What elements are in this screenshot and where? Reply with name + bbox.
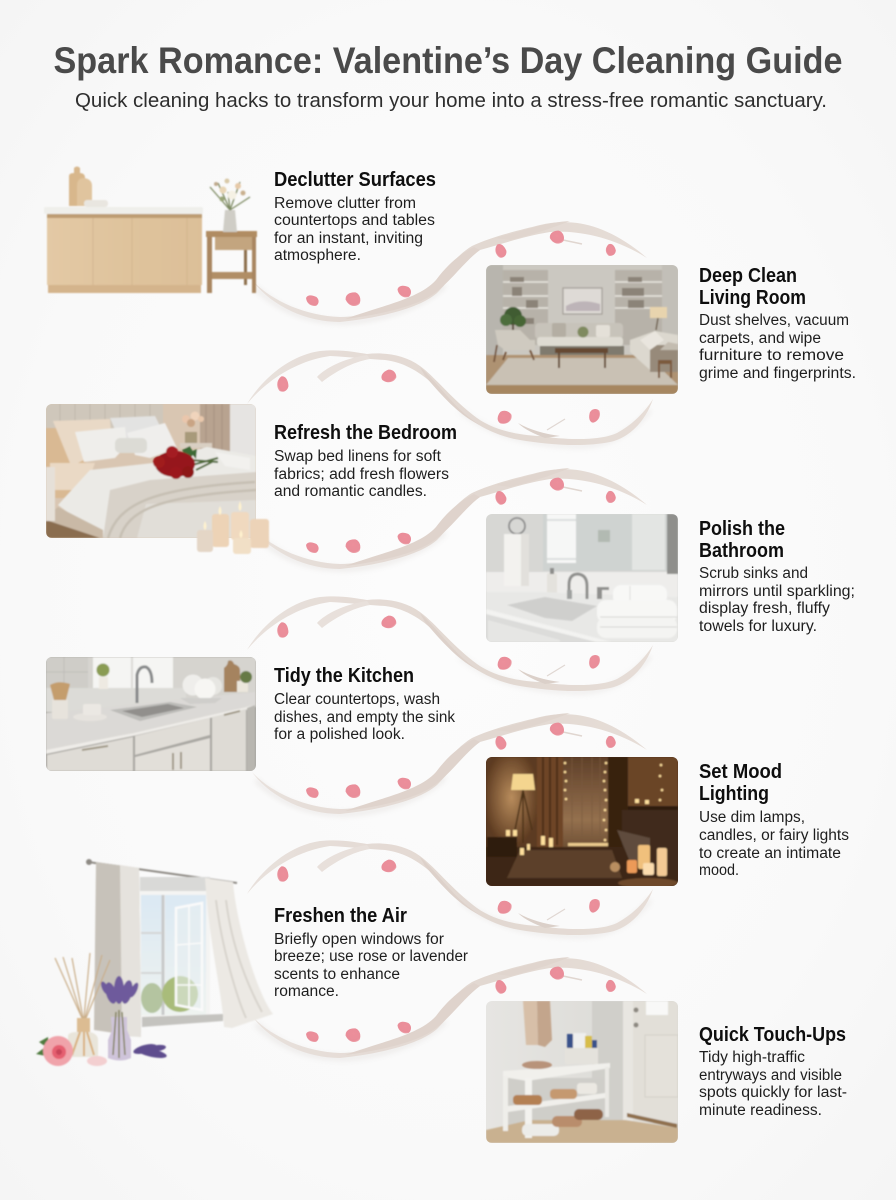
- step: Declutter Surfaces: atmosphere.: [274, 247, 361, 264]
- ribbon connector: Bathroom to Kitchen: [247, 596, 653, 692]
- photo: bedroom: [46, 404, 269, 554]
- step: Set Mood Lighting: to create an intimate: [699, 845, 841, 862]
- step: Tidy the Kitchen: for a polished look.: [274, 726, 405, 743]
- step: Deep Clean Living Room: Dust shelves, vacuum: [699, 312, 849, 329]
- ribbon connector: Declutter to Living Room: [252, 221, 647, 322]
- step: Freshen the Air: [274, 904, 468, 1000]
- step: Tidy the Kitchen: dishes, and empty the sink: [274, 709, 455, 726]
- photo: mood lighting: [486, 757, 678, 888]
- step: Freshen the Air: scents to enhance: [274, 966, 400, 983]
- step: Deep Clean Living Room: Deep Clean: [699, 264, 797, 287]
- step: Freshen the Air: Briefly open windows for: [274, 931, 444, 948]
- step: Tidy the Kitchen: Clear countertops, wash: [274, 691, 440, 708]
- illustration: kitchen counter and side table: [44, 166, 257, 293]
- step: Deep Clean Living Room: carpets, and wipe: [699, 330, 821, 347]
- step: Deep Clean Living Room: [699, 264, 856, 382]
- step: Declutter Surfaces: Remove clutter from: [274, 195, 416, 212]
- step: Declutter Surfaces: for an instant, inviting: [274, 230, 423, 247]
- step: Quick Touch-Ups: entryways and visible: [699, 1067, 842, 1084]
- step: Polish the Bathroom: Bathroom: [699, 539, 784, 562]
- step: Quick Touch-Ups: Quick Touch-Ups: [699, 1023, 846, 1046]
- step: Quick Touch-Ups: Tidy high-traffic: [699, 1049, 805, 1066]
- step: Refresh the Bedroom: fabrics; add fresh flowers: [274, 466, 449, 483]
- step: Deep Clean Living Room: Living Room: [699, 286, 806, 309]
- photo: kitchen: [46, 657, 256, 771]
- step: Set Mood Lighting: Set Mood: [699, 760, 782, 783]
- photo: entryway: [486, 1001, 678, 1143]
- step: Quick Touch-Ups: [699, 1023, 847, 1119]
- icon: candles: [197, 501, 269, 554]
- step: Set Mood Lighting: Lighting: [699, 782, 769, 805]
- step: Freshen the Air: romance.: [274, 983, 339, 1000]
- title: Spark Romance: Valentine’s Day Cleaning Guide: [54, 40, 842, 81]
- ribbon connector: Living Room to Bedroom: [247, 350, 653, 446]
- step: Refresh the Bedroom: and romantic candles.: [274, 483, 427, 500]
- step: Declutter Surfaces: Declutter Surfaces: [274, 168, 436, 191]
- step: Quick Touch-Ups: minute readiness.: [699, 1102, 822, 1119]
- step: Set Mood Lighting: mood.: [699, 862, 739, 879]
- ribbon connector: Kitchen to Mood Lighting: [252, 713, 647, 814]
- step: Polish the Bathroom: Scrub sinks and: [699, 565, 808, 582]
- photo: living room: [486, 265, 678, 394]
- step: Polish the Bathroom: towels for luxury.: [699, 618, 817, 635]
- step: Declutter Surfaces: [274, 168, 436, 264]
- step: Polish the Bathroom: [699, 517, 855, 635]
- illustration: open window with diffuser, lavender and rose: [36, 859, 273, 1066]
- step: Freshen the Air: breeze; use rose or lavender: [274, 948, 468, 965]
- photo: bathroom: [486, 514, 678, 642]
- step: Tidy the Kitchen: Tidy the Kitchen: [274, 664, 414, 687]
- ribbon connector: Mood Lighting to Fresh Air: [247, 840, 653, 936]
- step: Polish the Bathroom: Polish the: [699, 517, 785, 540]
- step: Polish the Bathroom: display fresh, fluffy: [699, 600, 830, 617]
- step: Refresh the Bedroom: Swap bed linens for soft: [274, 448, 442, 465]
- step: Deep Clean Living Room: grime and fingerprints.: [699, 365, 856, 382]
- ribbon connector: Bedroom to Bathroom: [252, 468, 647, 569]
- step: Polish the Bathroom: mirrors until sparkling;: [699, 583, 855, 600]
- step: Tidy the Kitchen: [274, 664, 455, 743]
- step: Freshen the Air: Freshen the Air: [274, 904, 407, 927]
- subtitle: Quick cleaning hacks to transform your home into a stress-free romantic sanctuary.: [75, 90, 827, 112]
- ribbon connector: Fresh Air to Touch-Ups: [252, 957, 647, 1058]
- step: Set Mood Lighting: [699, 760, 849, 879]
- step: Set Mood Lighting: Use dim lamps,: [699, 809, 805, 826]
- step: Set Mood Lighting: candles, or fairy lights: [699, 827, 849, 844]
- step: Declutter Surfaces: countertops and tables: [274, 212, 435, 229]
- step: Refresh the Bedroom: [274, 421, 457, 500]
- step: Quick Touch-Ups: spots quickly for last-: [699, 1084, 847, 1101]
- step: Deep Clean Living Room: furniture to remove: [699, 347, 844, 364]
- step: Refresh the Bedroom: Refresh the Bedroom: [274, 421, 457, 444]
